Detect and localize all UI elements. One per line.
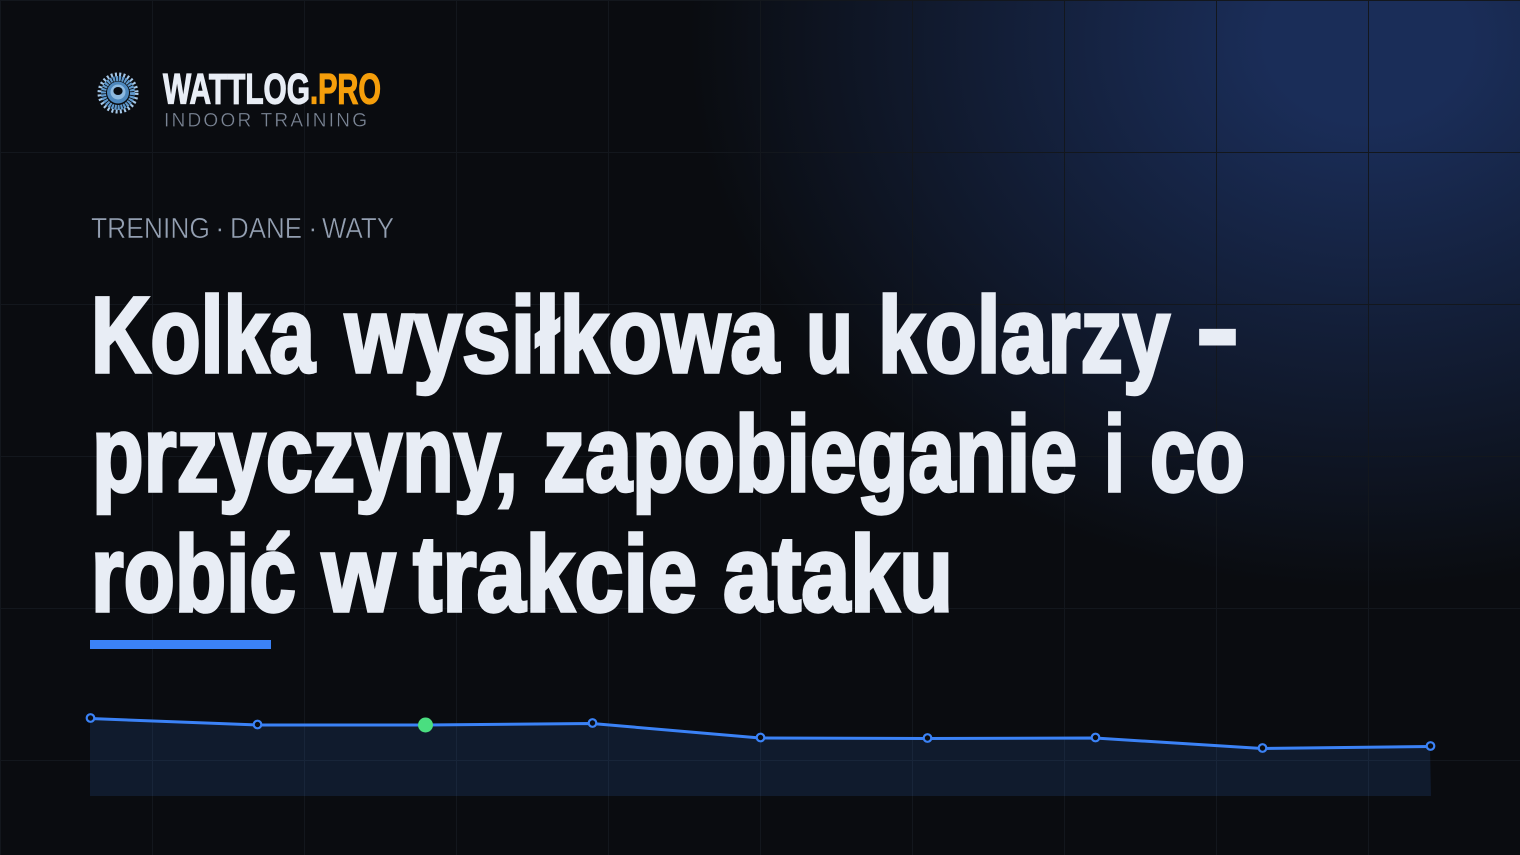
eyebrow: · bbox=[215, 213, 225, 245]
title: robić bbox=[91, 513, 296, 634]
title accent bar bbox=[90, 640, 271, 649]
title: trakcie bbox=[413, 513, 697, 634]
eyebrow: TRENING bbox=[91, 213, 210, 245]
icon: cassette sprocket logo bbox=[100, 74, 136, 112]
brand wordmark: .PRO bbox=[310, 66, 381, 114]
title bbox=[91, 268, 1245, 634]
chart line bbox=[90, 718, 1430, 748]
title: co bbox=[1150, 393, 1245, 514]
eyebrow: WATY bbox=[322, 213, 394, 245]
chart data points bbox=[87, 714, 1434, 752]
title: – bbox=[1199, 268, 1236, 389]
line chart bbox=[87, 714, 1434, 796]
title: w bbox=[321, 513, 396, 634]
title: zapobieganie bbox=[543, 393, 1077, 514]
title: u bbox=[806, 274, 853, 395]
title: i bbox=[1104, 393, 1125, 514]
title: przyczyny, bbox=[92, 393, 518, 514]
eyebrow: DANE bbox=[230, 213, 302, 245]
title: Kolka bbox=[91, 274, 316, 395]
title: ataku bbox=[723, 513, 953, 634]
chart area fill bbox=[90, 718, 1431, 796]
brand tagline: INDOOR TRAINING bbox=[164, 110, 367, 132]
eyebrow bbox=[91, 213, 394, 245]
brand wordmark: WATTLOG bbox=[163, 66, 310, 114]
eyebrow: · bbox=[308, 213, 318, 245]
title: wysiłkowa bbox=[344, 274, 780, 395]
title: kolarzy bbox=[878, 274, 1170, 395]
chart highlighted point bbox=[418, 718, 433, 732]
